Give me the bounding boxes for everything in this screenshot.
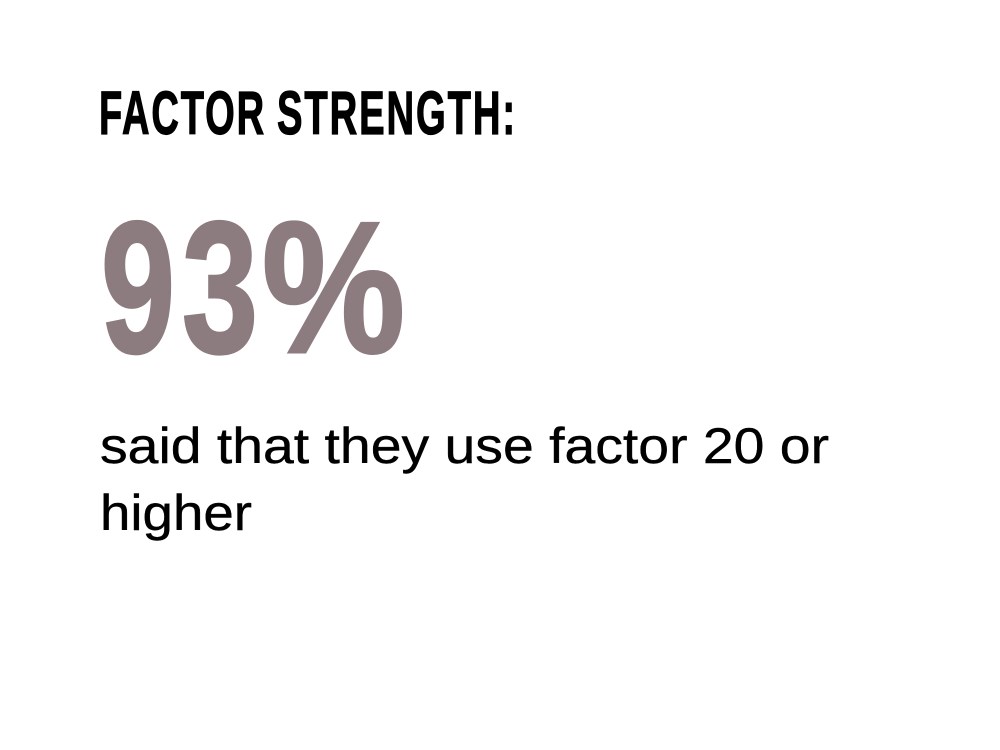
description text: said that they use factor 20 or [100, 418, 829, 474]
heading: FACTOR [99, 79, 266, 147]
big statistic: 3 [182, 183, 258, 392]
heading: STRENGTH: [277, 79, 517, 147]
big statistic [101, 183, 405, 392]
big statistic: % [262, 183, 405, 392]
big statistic: 9 [101, 183, 175, 392]
description text: higher [100, 485, 252, 541]
heading [99, 79, 517, 147]
description text [100, 418, 829, 541]
